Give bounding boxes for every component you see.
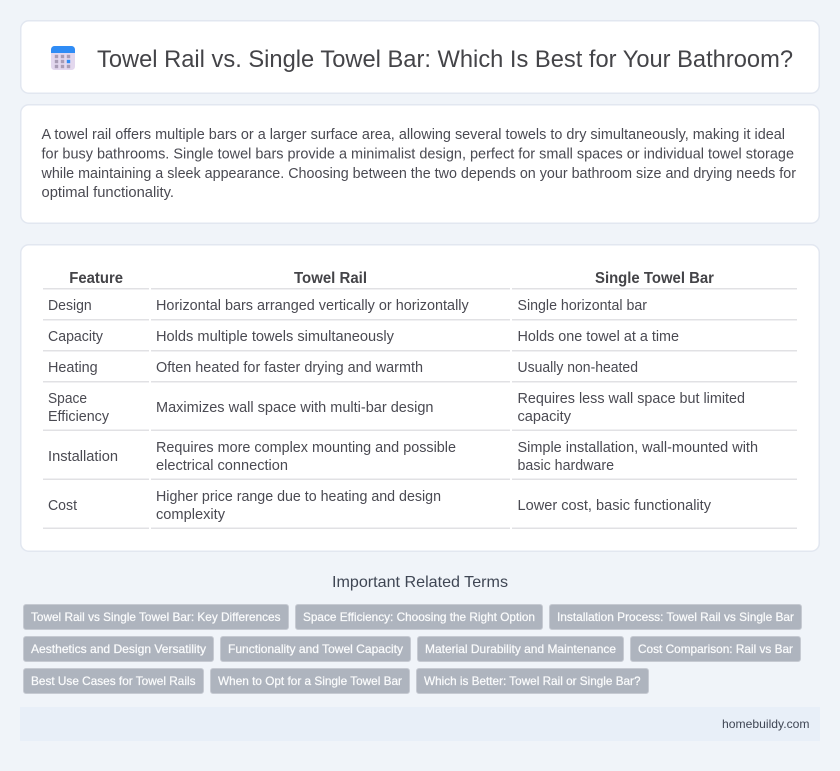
row: installation xyxy=(43,440,797,480)
row: cost: Cost xyxy=(48,498,77,514)
row: design xyxy=(43,298,797,320)
row: space efficiency: Maximizes wall space with multi-bar design xyxy=(156,400,434,416)
row: heating: Heating xyxy=(48,360,98,376)
panel: title card xyxy=(21,21,819,93)
panel: intro paragraph xyxy=(21,105,819,223)
tag xyxy=(418,636,624,662)
row: capacity xyxy=(43,329,797,352)
intro text block xyxy=(41,127,796,201)
row: cost: Lower cost, basic functionality xyxy=(518,498,712,514)
row: design: Horizontal bars arranged vertically or horizontally xyxy=(156,298,469,314)
row: cost: Higher price range due to heating and design xyxy=(156,489,441,505)
table header row: Single Towel Bar xyxy=(595,270,714,287)
related terms tags xyxy=(24,604,802,694)
tag xyxy=(210,668,410,694)
heading: important related terms: Important Related Terms xyxy=(332,574,508,591)
row: design: Single horizontal bar xyxy=(518,298,647,314)
panel: comparison table xyxy=(21,245,819,551)
row: capacity: Holds one towel at a time xyxy=(518,329,679,345)
row: space efficiency xyxy=(43,391,797,431)
row: capacity: Holds multiple towels simultaneously xyxy=(156,329,395,345)
intro text block: for busy bathrooms. Single towel bars provide a minimalist design, perfect for small spaces or individual towel storage xyxy=(42,146,794,162)
table header row xyxy=(43,270,797,290)
row: installation: Simple installation, wall-mounted with xyxy=(518,440,758,456)
intro text block: optimal functionality. xyxy=(42,185,174,201)
tag xyxy=(24,668,204,694)
tag: Space Efficiency: Choosing the Right Option xyxy=(303,610,535,624)
tag xyxy=(630,636,800,662)
row: design: Design xyxy=(48,298,92,314)
row: cost xyxy=(43,489,797,529)
intro text block: while maintaining a sleek appearance. Choosing between the two depends on your bathroom size and drying needs for xyxy=(41,166,796,182)
tag: Functionality and Towel Capacity xyxy=(228,642,403,656)
footer source text: homebuildy.com xyxy=(722,717,810,731)
row: installation: Requires more complex mounting and possible xyxy=(156,440,456,456)
table header row: Towel Rail xyxy=(294,270,367,287)
tag xyxy=(550,604,802,630)
tag xyxy=(416,668,648,694)
tag: Best Use Cases for Towel Rails xyxy=(31,674,196,688)
intro text block: A towel rail offers multiple bars or a larger surface area, allowing several towels to dry simultaneously, making it ideal xyxy=(42,127,785,143)
row: installation: basic hardware xyxy=(518,458,614,474)
row: heating: Usually non-heated xyxy=(518,360,638,376)
row: space efficiency: capacity xyxy=(518,409,572,425)
tag: Towel Rail vs Single Towel Bar: Key Differences xyxy=(31,610,280,624)
tag: Installation Process: Towel Rail vs Single Bar xyxy=(557,610,794,624)
footer bar xyxy=(20,707,820,741)
tag: Material Durability and Maintenance xyxy=(425,642,616,656)
table header row: Feature xyxy=(69,270,123,287)
tag xyxy=(24,604,288,630)
row: heating: Often heated for faster drying and warmth xyxy=(156,360,423,376)
row: cost: complexity xyxy=(156,507,226,523)
tag: Aesthetics and Design Versatility xyxy=(31,642,206,656)
title: Towel Rail vs. Single Towel Bar: Which Is Best for Your Bathroom? xyxy=(97,46,793,73)
row: space efficiency: Space xyxy=(48,391,87,407)
tag: Cost Comparison: Rail vs Bar xyxy=(638,642,793,656)
row: space efficiency: Efficiency xyxy=(48,409,110,425)
tag: Which is Better: Towel Rail or Single Bar? xyxy=(424,674,641,688)
row: space efficiency: Requires less wall space but limited xyxy=(518,391,745,407)
tag: When to Opt for a Single Towel Bar xyxy=(218,674,402,688)
icon: calendar xyxy=(51,46,75,70)
tag xyxy=(296,604,542,630)
row: installation: Installation xyxy=(48,449,118,465)
tag xyxy=(220,636,410,662)
row: heating xyxy=(43,360,797,382)
row: installation: electrical connection xyxy=(156,458,288,474)
row: capacity: Capacity xyxy=(48,329,104,345)
tag xyxy=(24,636,214,662)
